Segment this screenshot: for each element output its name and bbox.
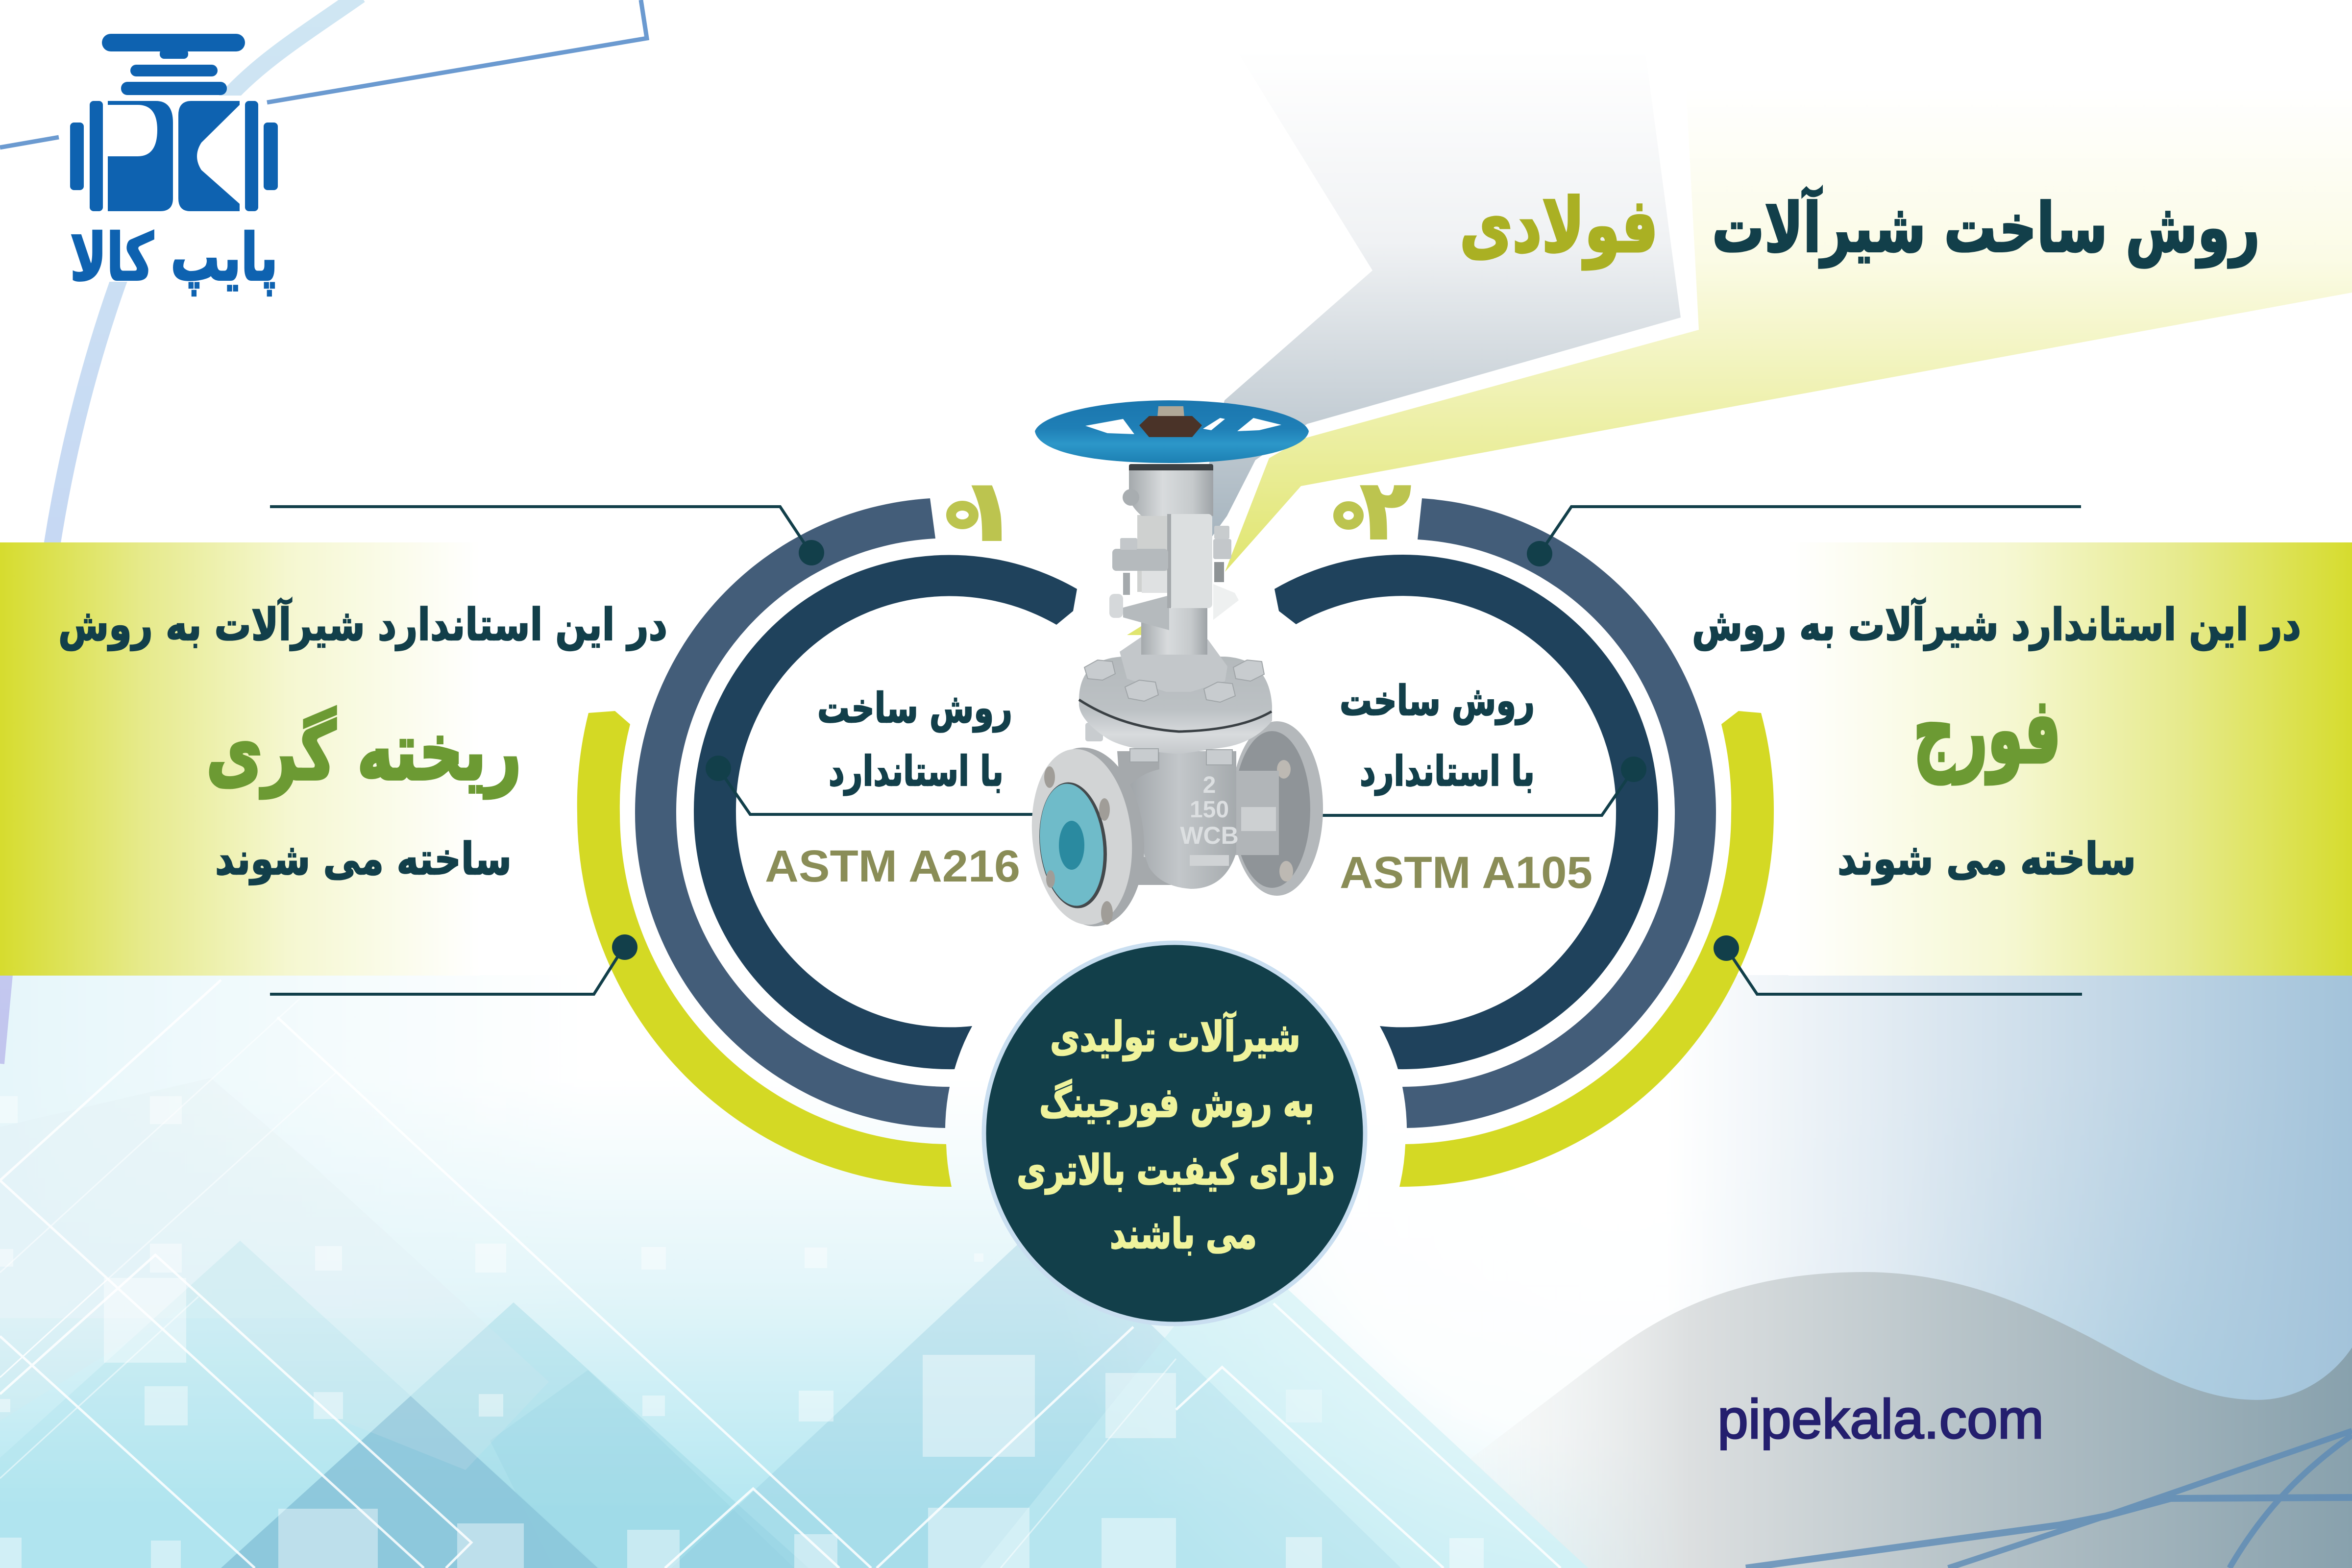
valve stem and yoke [1109, 464, 1239, 655]
inner right line two: با استاندارد [1360, 747, 1535, 796]
left method name: ریخته گری [206, 706, 521, 799]
left text block [58, 598, 667, 885]
left ring group [577, 498, 1077, 1187]
yellow side band right [1788, 542, 2352, 976]
logo mark [70, 34, 278, 211]
valve body: WCB [1180, 822, 1239, 849]
inner right line one: روش ساخت [1340, 677, 1535, 725]
valve lower bonnet flanges [1079, 637, 1272, 765]
yellow side band left [0, 542, 480, 976]
valve right flange [1231, 721, 1323, 896]
right ring group [1274, 498, 1774, 1187]
valve left flange [1024, 742, 1153, 932]
inner left line one: روش ساخت [817, 684, 1012, 733]
thin blue frame line [0, 0, 647, 147]
center callout circle [984, 943, 1365, 1324]
grey wave [1470, 1272, 2352, 1568]
left outer yellow ring [577, 711, 952, 1187]
left middle ring [635, 498, 950, 1128]
valve handwheel [1035, 400, 1309, 463]
step number 02: ۰ [1330, 473, 1367, 541]
callout lines and dots [270, 507, 2082, 994]
inner left ASTM code: ASTM A216 [765, 841, 1020, 891]
background geometric pattern [0, 980, 1588, 1568]
website address: pipekala.com [1717, 1388, 2044, 1450]
wave net lines [1746, 1431, 2352, 1568]
step number 02: ۲ [1361, 463, 1410, 557]
left intro line: در این استاندارد شیرآلات به روش [58, 598, 667, 651]
callout line one: شیرآلات تولیدی [1050, 1011, 1300, 1061]
step number 02 [1330, 463, 1410, 557]
title [1460, 182, 2260, 270]
callout line two: به روش فورجینگ [1039, 1078, 1314, 1127]
right text block [1692, 598, 2301, 885]
logo wordmark: پایپ کالا [70, 220, 278, 295]
inner left standard label [765, 684, 1020, 891]
right method name: فورج [1913, 678, 2061, 784]
gate valve illustration [1024, 400, 1323, 932]
valve body: 2 [1203, 772, 1216, 798]
step number 01: ۰ [944, 473, 980, 541]
inner right ASTM code: ASTM A105 [1340, 848, 1592, 898]
right inner ring [1274, 555, 1658, 1069]
title accent word: فولادی [1460, 182, 1658, 270]
valve body: 150 [1190, 797, 1229, 823]
left closing line: ساخته می شوند [215, 833, 512, 885]
yellow title wedge [1225, 88, 2352, 572]
right outer yellow ring [1399, 711, 1774, 1187]
grey title wedge [1191, 37, 1681, 539]
small yellow tip behind valve [1127, 626, 1141, 635]
inner right standard label [1340, 677, 1592, 898]
left inner ring [694, 555, 1077, 1069]
callout line four: می باشند [1110, 1210, 1257, 1258]
callout line three: دارای کیفیت بالاتری [1017, 1146, 1335, 1195]
valve body [1117, 751, 1279, 889]
step number 01: ۱ [965, 465, 1013, 557]
logo [61, 34, 278, 295]
right middle ring [1402, 498, 1716, 1128]
inner left line two: با استاندارد [829, 747, 1004, 796]
light decorative arc [0, 0, 360, 1063]
right closing line: ساخته می شوند [1838, 833, 2136, 885]
